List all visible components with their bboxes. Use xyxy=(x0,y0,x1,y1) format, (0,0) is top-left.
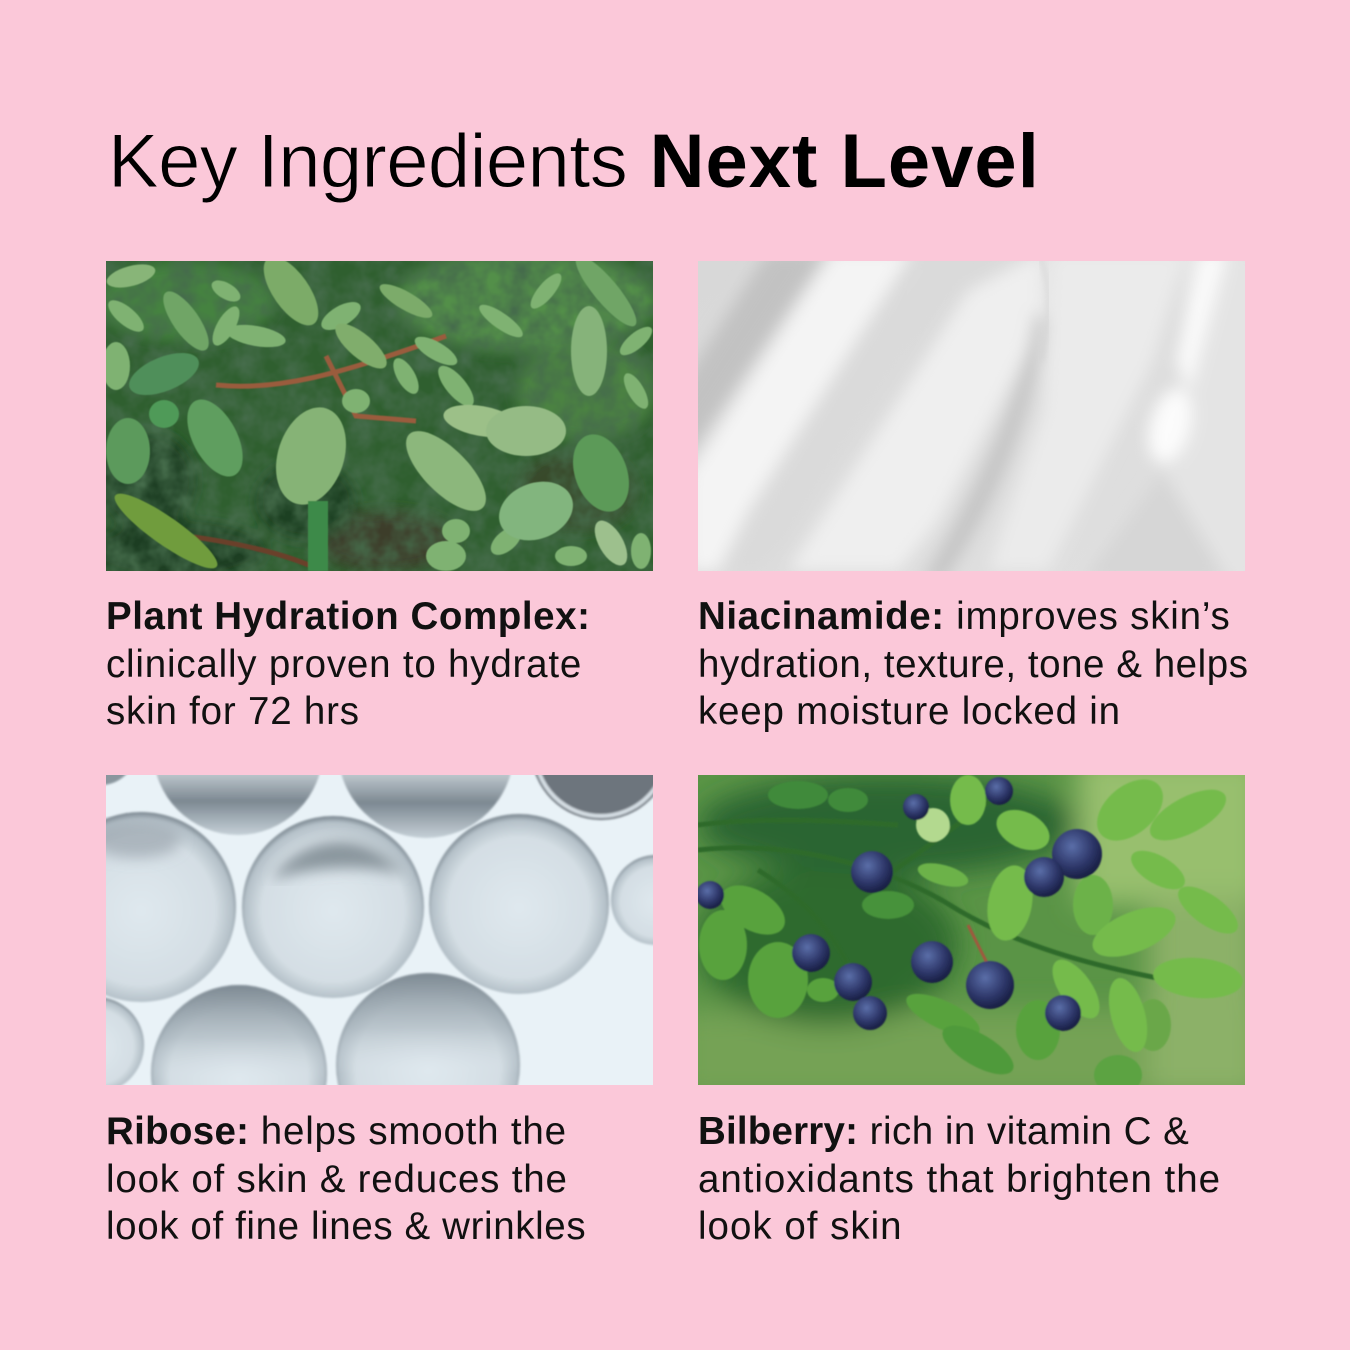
photo: bilberry branch with berries xyxy=(698,775,1245,1085)
text: ribose: look of fine lines & wrinkles xyxy=(106,1205,586,1248)
title: Key Ingredients Next Level xyxy=(108,119,1040,204)
text: plant hydration complex: clinically proven to hydrate xyxy=(106,643,582,686)
text: niacinamide: hydration, texture, tone & helps xyxy=(698,643,1249,686)
text: ribose xyxy=(106,1110,586,1248)
text: ribose: Ribose: helps smooth the xyxy=(106,1110,567,1153)
text: bilberry xyxy=(698,1110,1221,1248)
text: bilberry: antioxidants that brighten the xyxy=(698,1158,1221,1201)
text: niacinamide xyxy=(698,595,1249,733)
text: plant hydration complex: skin for 72 hrs xyxy=(106,690,360,733)
text: niacinamide: keep moisture locked in xyxy=(698,690,1121,733)
text: ribose: look of skin & reduces the xyxy=(106,1158,568,1201)
photo: ribose clear spheres xyxy=(106,775,653,1085)
photo: plant hydration complex greens xyxy=(106,261,653,571)
text: plant hydration complex: Plant Hydration Complex: xyxy=(106,595,591,638)
text: bilberry: look of skin xyxy=(698,1205,903,1248)
text: niacinamide: Niacinamide: improves skin’s xyxy=(698,595,1231,638)
photo: niacinamide white cream swirl xyxy=(698,261,1245,571)
text: plant hydration complex xyxy=(106,595,591,733)
text: bilberry: Bilberry: rich in vitamin C & xyxy=(698,1110,1189,1153)
